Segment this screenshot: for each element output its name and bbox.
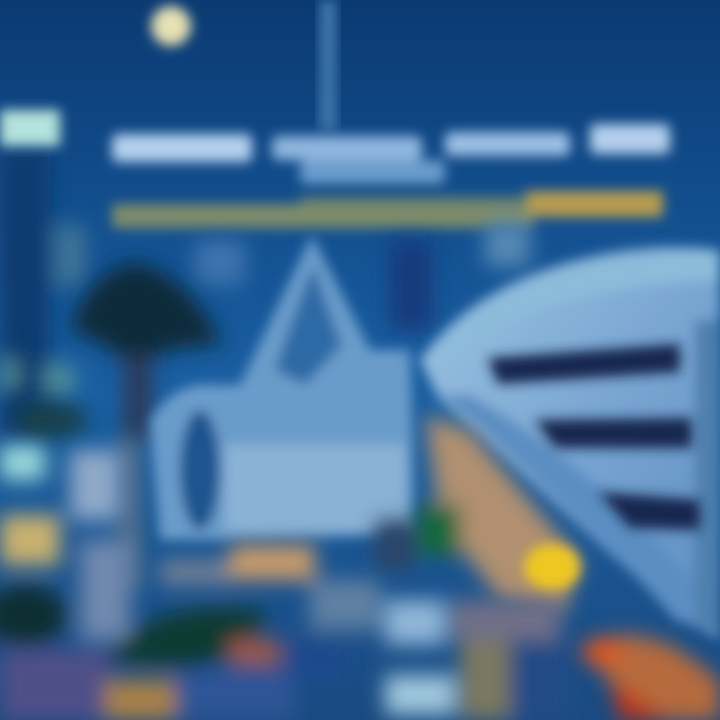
title text band: [112, 124, 670, 184]
street level lights and cars: [0, 445, 570, 720]
warm lit wall: [375, 415, 580, 610]
moon: [151, 6, 191, 46]
sail shaped building: [150, 235, 415, 540]
left tower: [0, 150, 85, 440]
central spire: [320, 0, 336, 130]
subtitle orange band: [112, 191, 663, 228]
distant towers: [195, 222, 530, 330]
palm tree: [12, 262, 222, 590]
building window bands: [488, 344, 700, 530]
yellow light: [524, 544, 580, 590]
large curved building: [420, 247, 720, 640]
orange foreground object: [582, 635, 720, 720]
tower top glow: [0, 110, 60, 146]
